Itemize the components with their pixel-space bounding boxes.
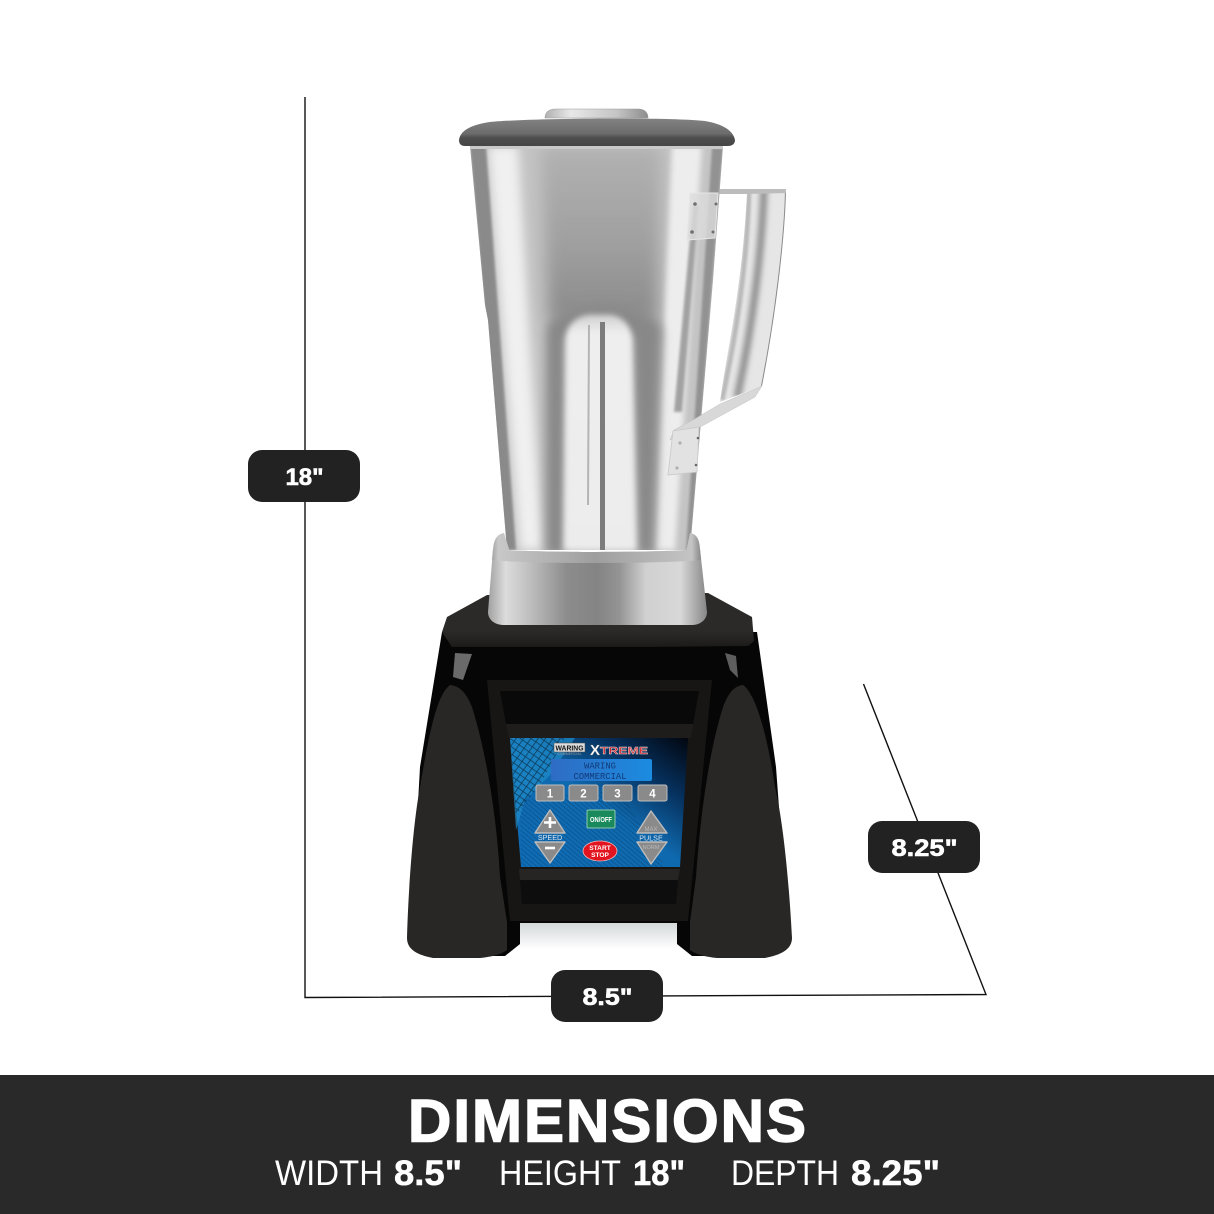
- panel artwork: [510, 738, 688, 867]
- lcd display: COMMERCIAL: [574, 772, 626, 782]
- control panel: [510, 738, 688, 867]
- width label: 8.5": [582, 984, 632, 1011]
- width label: [551, 970, 663, 1022]
- on/off button: ON/OFF: [590, 815, 612, 824]
- brand logo: WARING: [556, 744, 584, 753]
- start stop button: START: [589, 845, 611, 852]
- number buttons: 4: [649, 788, 656, 800]
- base body: [411, 632, 788, 956]
- dimension summary: 18": [633, 1154, 685, 1193]
- number buttons: 3: [614, 788, 621, 800]
- depth label: [868, 821, 980, 873]
- dimension summary: WIDTH: [275, 1154, 383, 1193]
- lcd display: WARING: [584, 762, 616, 772]
- blender product image: [407, 109, 792, 958]
- dimension lines: [305, 97, 986, 998]
- speed buttons: SPEED: [538, 833, 562, 842]
- steel collar: [488, 533, 707, 625]
- dimension summary: 8.25": [851, 1154, 940, 1193]
- on/off button: [587, 810, 615, 828]
- dimension summary: DEPTH: [731, 1154, 839, 1193]
- jar reflections: [488, 146, 542, 550]
- dimension summary: [275, 1154, 940, 1193]
- brand logo: [554, 742, 648, 759]
- lcd display: [551, 759, 652, 782]
- footer band: [0, 1075, 1214, 1214]
- handle upper bracket: [687, 193, 718, 240]
- pulse buttons: NORM: [642, 845, 660, 851]
- right foot: [690, 685, 792, 958]
- dimension summary: 8.5": [394, 1154, 462, 1193]
- control panel housing: [487, 680, 712, 921]
- glossy highlights: [453, 653, 738, 680]
- speed buttons: [535, 810, 565, 863]
- pulse buttons: [637, 811, 667, 864]
- base top plate: [442, 593, 754, 647]
- number buttons: 1: [547, 788, 554, 800]
- handle lower bracket: [668, 427, 699, 475]
- brand logo: X: [590, 742, 600, 759]
- lid: [459, 118, 735, 146]
- lid plug: [545, 109, 648, 118]
- left foot: [407, 685, 507, 958]
- brand logo: TREME: [600, 745, 648, 757]
- brand logo: COMMERCIAL: [557, 752, 582, 756]
- number buttons: [536, 785, 667, 801]
- title: DIMENSIONS: [408, 1088, 806, 1154]
- pulse buttons: MAX: [644, 827, 658, 833]
- start stop button: STOP: [591, 852, 610, 859]
- floor shadow: [515, 923, 683, 949]
- height label: [248, 450, 360, 502]
- stainless steel jar: [470, 146, 723, 555]
- dimension summary: HEIGHT: [499, 1154, 621, 1193]
- start stop button: [583, 841, 617, 861]
- jar handle: [720, 189, 786, 402]
- handle lower arm: [670, 386, 762, 440]
- number buttons: 2: [580, 788, 587, 800]
- depth label: 8.25": [892, 835, 958, 862]
- pulse buttons: PULSE: [639, 834, 663, 842]
- height label: 18": [285, 464, 324, 491]
